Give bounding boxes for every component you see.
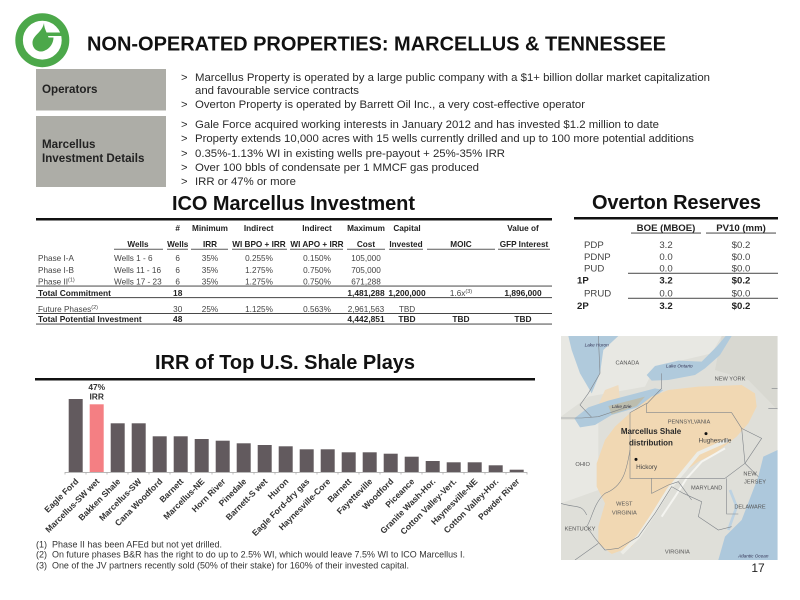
table: ICO Marcellus investment: GFP Interest xyxy=(500,240,549,249)
table: Overton reserves: 0.0 xyxy=(659,252,673,263)
bar chart: IRR by shale play: Powder River xyxy=(476,476,522,522)
table: ICO Marcellus investment xyxy=(36,218,552,324)
bar chart: IRR by shale play: Cotton Valley-Hor. xyxy=(442,476,500,535)
table: ICO Marcellus investment: 6 xyxy=(175,266,180,275)
map: Marcellus Shale distribution: OHIO xyxy=(575,462,590,468)
panel: operators: Operators xyxy=(42,83,97,96)
table: ICO Marcellus investment: 2,961,563 xyxy=(348,305,385,314)
bar chart: IRR by shale play: Huron xyxy=(266,476,290,501)
map: Marcellus Shale distribution: PENNSYLVANIA xyxy=(668,419,710,425)
table: ICO Marcellus investment: WI APO + IRR xyxy=(290,240,344,249)
footnotes: On future phases B&R has the right to do up to 2.5% WI, which would leave 7.5% WI to ICO Marcellus I. xyxy=(52,550,465,560)
title: NON-OPERATED PROPERTIES: MARCELLUS & TENNESSEE xyxy=(87,34,666,56)
table: ICO Marcellus investment: 48 xyxy=(173,314,183,324)
panel: marcellus investment details xyxy=(36,116,166,187)
table: ICO Marcellus investment: Wells 1 - 6 xyxy=(114,254,153,263)
heading: ICO Marcellus Investment: ICO Marcellus Investment xyxy=(172,193,415,215)
map: Marcellus Shale distribution: MARYLAND xyxy=(691,485,722,491)
table: ICO Marcellus investment: 0.750% xyxy=(303,266,331,275)
map: Marcellus Shale distribution: DELAWARE xyxy=(734,504,766,510)
bar chart: IRR by shale play: IRR xyxy=(89,392,104,402)
bar chart: IRR by shale play: Barnett xyxy=(325,476,354,504)
table: ICO Marcellus investment: Maximum xyxy=(347,224,385,233)
text block: operators bullets: Overton Property is operated by Barrett Oil Inc., a very cost-effective operator xyxy=(195,99,585,111)
map: Marcellus Shale distribution: Lake Huron xyxy=(585,343,609,348)
map: Marcellus Shale distribution: Atlantic Ocean xyxy=(737,553,769,558)
text block: marcellus bullets: Over 100 bbls of condensate per 1 MMCF gas produced xyxy=(195,162,479,174)
bar chart: IRR by shale play: Fayetteville xyxy=(335,476,375,516)
table: Overton reserves: BOE (MBOE) xyxy=(637,223,695,234)
icon: company logo xyxy=(19,17,66,63)
table: ICO Marcellus investment: Value of xyxy=(507,224,539,233)
map: Marcellus Shale distribution: Hughesville xyxy=(699,438,732,445)
map: Marcellus Shale distribution: NEW YORK xyxy=(715,377,746,383)
table: Overton reserves: $0.2 xyxy=(732,301,750,312)
footnotes: (1) xyxy=(36,540,47,550)
table: Overton reserves: 3.2 xyxy=(659,301,673,312)
table: Overton reserves: 3.2 xyxy=(659,276,673,286)
text block: marcellus bullets: > xyxy=(181,162,188,174)
map: Marcellus Shale distribution: JERSEY xyxy=(744,480,766,486)
bar chart: IRR by shale play: Bakken Shale xyxy=(76,476,123,523)
map: Marcellus Shale distribution: Hickory xyxy=(636,464,658,471)
table: ICO Marcellus investment: Minimum xyxy=(192,224,228,233)
table: ICO Marcellus investment: 1,481,288 xyxy=(347,288,385,298)
bar chart: IRR by shale play: Marcellus-NE xyxy=(161,476,207,521)
bar chart: IRR by shale play xyxy=(42,382,527,538)
bar chart: IRR by shale play: Barnett xyxy=(157,476,186,504)
table: ICO Marcellus investment: 1.6x xyxy=(450,289,465,298)
table: ICO Marcellus investment: Total Commitment xyxy=(38,288,111,298)
table: Overton reserves: $0.0 xyxy=(732,288,750,300)
table: ICO Marcellus investment: 0.150% xyxy=(303,254,331,263)
map: Marcellus Shale distribution: WEST xyxy=(616,502,633,508)
table: ICO Marcellus investment: TBD xyxy=(514,314,532,324)
table: Overton reserves: 0.0 xyxy=(659,288,673,300)
heading: IRR of Top U.S. Shale Plays: IRR of Top U.S. Shale Plays xyxy=(155,352,415,374)
table: ICO Marcellus investment: Phase I-B xyxy=(38,266,74,275)
table: ICO Marcellus investment: (2) xyxy=(91,305,98,311)
table: ICO Marcellus investment: 35% xyxy=(202,266,218,275)
table: ICO Marcellus investment: 30 xyxy=(173,305,183,314)
divider bar above chart xyxy=(35,378,535,380)
table: ICO Marcellus investment: Capital xyxy=(393,224,421,233)
table: Overton reserves: PDP xyxy=(584,240,604,251)
table: ICO Marcellus investment: Wells xyxy=(127,240,149,249)
table: ICO Marcellus investment: # xyxy=(175,224,180,233)
table: Overton reserves: $0.2 xyxy=(732,276,750,286)
text block: marcellus bullets: > xyxy=(181,119,188,131)
table: ICO Marcellus investment: Total Potential Investment xyxy=(38,314,142,324)
table: ICO Marcellus investment: Wells 11 - 16 xyxy=(114,266,161,275)
table: Overton reserves: 1P xyxy=(577,276,589,286)
table: ICO Marcellus investment: Phase II xyxy=(38,278,68,286)
table: ICO Marcellus investment: 1,896,000 xyxy=(504,288,542,298)
text block: marcellus bullets: Gale Force acquired working interests in January 2012 and has invested $1.2 million to date xyxy=(195,119,659,131)
text block: operators bullets: > xyxy=(181,72,188,84)
map: Marcellus Shale distribution: Lake Erie xyxy=(612,404,632,409)
bar chart: IRR by shale play: Pinedale xyxy=(217,476,249,508)
table: ICO Marcellus investment: 705,000 xyxy=(351,266,381,275)
bar chart: IRR by shale play: Marcellus-SW xyxy=(97,476,144,523)
table: ICO Marcellus investment: Cost xyxy=(357,240,375,249)
table: ICO Marcellus investment: TBD xyxy=(399,305,415,314)
table: ICO Marcellus investment: 671,288 xyxy=(351,278,381,286)
table: ICO Marcellus investment: 25% xyxy=(202,305,218,314)
page number: 17 xyxy=(751,561,765,575)
footnotes: One of the JV partners recently sold (50% of their stake) for 160% of their invested capital. xyxy=(52,560,409,570)
table: Overton reserves: $0.2 xyxy=(732,240,750,251)
table: ICO Marcellus investment: Indirect xyxy=(302,224,332,233)
text block: operators bullets: and favourable service contracts xyxy=(195,85,359,97)
bar chart: IRR by shale play: Cotton Valley-Vert. xyxy=(398,476,458,537)
bar chart: IRR by shale play: Granite Wash-Hor. xyxy=(378,476,437,536)
table: ICO Marcellus investment: (3) xyxy=(465,289,472,295)
table: ICO Marcellus investment: IRR xyxy=(203,240,217,249)
table: ICO Marcellus investment: 4,442,851 xyxy=(347,314,385,324)
table: ICO Marcellus investment: 0.255% xyxy=(245,254,273,263)
table: ICO Marcellus investment: 1.125% xyxy=(245,305,273,314)
table: ICO Marcellus investment: 1.275% xyxy=(245,266,273,275)
table: ICO Marcellus investment: 18 xyxy=(173,288,183,298)
table: ICO Marcellus investment: 35% xyxy=(202,278,218,286)
table: Overton reserves: $0.0 xyxy=(732,264,750,274)
text block: marcellus bullets: Property extends 10,000 acres with 15 wells currently drilled and up to 100 more potential additions xyxy=(195,133,694,145)
table: ICO Marcellus investment: 1.275% xyxy=(245,278,273,286)
table: Overton reserves: 2P xyxy=(577,301,589,312)
table: Overton reserves: PDNP xyxy=(584,252,611,263)
footnotes: (3) xyxy=(36,560,47,570)
bar chart: IRR by shale play: Cana Woodford xyxy=(113,476,164,528)
bar chart: IRR by shale play: Barnett-S wet xyxy=(224,476,270,522)
heading: Overton Reserves: Overton Reserves xyxy=(592,192,761,214)
text block: operators bullets: Marcellus Property is operated by a large public company with a $1+ billion dollar market capitalization xyxy=(195,72,710,84)
map: Marcellus Shale distribution xyxy=(561,336,778,560)
map: Marcellus Shale distribution: NEW xyxy=(743,471,757,477)
table: ICO Marcellus investment: 105,000 xyxy=(351,254,381,263)
bar chart: IRR by shale play: Piceance xyxy=(383,476,417,509)
table: Overton reserves: 3.2 xyxy=(659,240,673,251)
footnotes xyxy=(36,540,465,570)
bar chart: IRR by shale play: Eagle Ford xyxy=(42,476,80,514)
table: ICO Marcellus investment: 6 xyxy=(175,278,180,286)
text block: marcellus bullets: IRR or 47% or more xyxy=(195,176,296,188)
bar chart: IRR by shale play: Eagle Ford-dry gas xyxy=(250,476,312,538)
text block: marcellus bullets: > xyxy=(181,133,188,145)
table: ICO Marcellus investment: 1,200,000 xyxy=(388,288,426,298)
table: Overton reserves xyxy=(574,217,778,312)
panel: operators xyxy=(36,69,166,110)
table: Overton reserves: PRUD xyxy=(584,288,611,300)
table: ICO Marcellus investment: MOIC xyxy=(450,240,472,249)
table: Overton reserves: $0.0 xyxy=(732,252,750,263)
table: ICO Marcellus investment: Wells xyxy=(167,240,189,249)
text block: marcellus bullets: > xyxy=(181,148,188,160)
table: ICO Marcellus investment: Invested xyxy=(389,240,423,249)
table: ICO Marcellus investment: TBD xyxy=(398,314,416,324)
footnotes: (2) xyxy=(36,550,47,560)
table: Overton reserves: 0.0 xyxy=(659,264,673,274)
table: ICO Marcellus investment: (1) xyxy=(68,278,75,284)
table: ICO Marcellus investment: 0.750% xyxy=(303,278,331,286)
map: Marcellus Shale distribution: VIRGINIA xyxy=(612,510,637,516)
table: ICO Marcellus investment: Phase I-A xyxy=(38,254,74,263)
map: Marcellus Shale distribution: KENTUCKY xyxy=(565,527,596,533)
text block: marcellus bullets: 0.35%-1.13% WI in existing wells pre-payout + 25%-35% IRR xyxy=(195,148,505,160)
text block: marcellus bullets xyxy=(181,119,694,188)
map: Marcellus Shale distribution: Marcellus Shale xyxy=(621,427,682,436)
bar chart: IRR by shale play: Haynesville-NE xyxy=(429,476,480,527)
text block: operators bullets xyxy=(181,72,710,111)
text block: operators bullets: > xyxy=(181,99,188,111)
table: ICO Marcellus investment: 6 xyxy=(175,254,180,263)
bar chart: IRR by shale play: Haynesville-Core xyxy=(277,476,333,532)
panel: marcellus investment details: Investment Details xyxy=(42,152,144,165)
map: Marcellus Shale distribution: VIRGINIA xyxy=(665,549,690,555)
map: Marcellus Shale distribution: distribution xyxy=(629,439,673,448)
table: ICO Marcellus investment: 0.563% xyxy=(303,305,331,314)
table: Overton reserves: PUD xyxy=(584,264,604,274)
bar chart: IRR by shale play: Woodford xyxy=(360,476,395,512)
map: Marcellus Shale distribution: Lake Ontario xyxy=(666,364,693,369)
table: Overton reserves: PV10 (mm) xyxy=(716,223,766,234)
map: Marcellus Shale distribution: CANADA xyxy=(616,360,639,366)
bar chart: IRR by shale play: Marcellus-SW wet xyxy=(43,476,102,535)
text block: marcellus bullets: > xyxy=(181,176,188,188)
table: ICO Marcellus investment: 35% xyxy=(202,254,218,263)
bar chart: IRR by shale play: 47% xyxy=(88,382,106,392)
table: ICO Marcellus investment: Wells 17 - 23 xyxy=(114,278,162,286)
table: ICO Marcellus investment: WI BPO + IRR xyxy=(232,240,286,249)
bar chart: IRR by shale play: Horn River xyxy=(190,476,228,514)
table: ICO Marcellus investment: TBD xyxy=(452,314,470,324)
table: ICO Marcellus investment: Indirect xyxy=(244,224,274,233)
panel: marcellus investment details: Marcellus xyxy=(42,138,96,151)
table: ICO Marcellus investment: Future Phases xyxy=(38,305,91,314)
footnotes: Phase II has been AFEd but not yet drilled. xyxy=(52,540,222,550)
